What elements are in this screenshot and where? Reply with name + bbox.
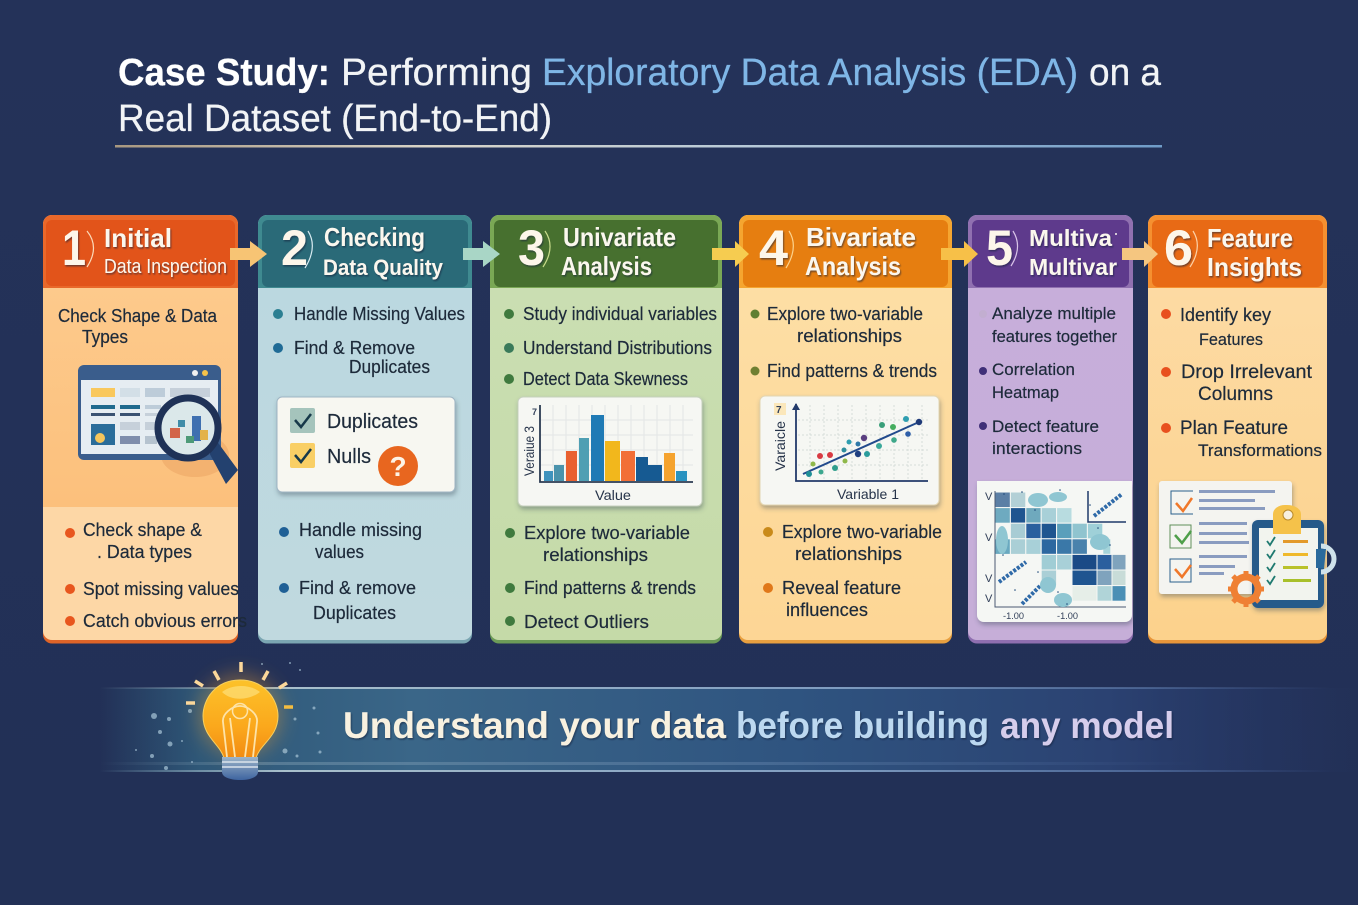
panel 6 list: Transformations <box>1198 441 1322 460</box>
panel 5 list: interactions <box>992 439 1082 458</box>
icon: checklist document and clipboard with gear <box>1159 481 1334 608</box>
panel 6 list: Features <box>1199 330 1263 349</box>
panel 1 heading <box>104 223 227 278</box>
panel 5 list: Heatmap <box>992 383 1059 402</box>
panel 4 heading <box>805 222 916 281</box>
panel 2 lower list: Handle missing <box>299 520 422 540</box>
panel 6 list: Plan Feature <box>1180 418 1288 439</box>
panel 6 list: Identify key <box>1180 305 1271 325</box>
panel 6 list: Columns <box>1198 384 1273 405</box>
title: Exploratory Data Analysis (EDA) <box>542 52 1078 94</box>
panel 6 list: Drop Irrelevant <box>1181 362 1313 383</box>
panel 5: multivariate analysis <box>968 215 1133 644</box>
panel 4 upper list: Find patterns & trends <box>767 361 937 381</box>
panel 3 upper list: Understand Distributions <box>523 338 712 358</box>
panel 2 heading: Checking <box>324 222 425 252</box>
step number 5: 5 <box>986 220 1013 276</box>
panel 1 intro text: Types <box>82 327 128 347</box>
panel 2 upper list: Duplicates <box>349 357 430 377</box>
panel 4 upper list <box>750 304 937 381</box>
title: on a <box>1089 52 1162 94</box>
panel 3 upper list: Study individual variables <box>523 304 717 324</box>
panel 2 upper list <box>273 304 465 377</box>
correlation heatmap: V <box>985 532 993 544</box>
arrow: step 1 to 2 <box>230 241 267 267</box>
panel 4 upper list: relationships <box>797 326 902 346</box>
step number 2: 2 <box>281 220 308 276</box>
panel 3 lower list: Detect Outliers <box>524 612 649 632</box>
correlation heatmap <box>977 481 1132 622</box>
scatter plot card: 7 <box>776 405 782 416</box>
panel 3 lower list: Explore two-variable <box>524 523 690 543</box>
panel 1 checklist: Spot missing values <box>83 579 239 599</box>
panel 1 intro text <box>58 306 218 347</box>
histogram card: Value <box>595 487 631 503</box>
panel 1 checklist: Check shape & <box>83 520 202 540</box>
correlation heatmap: V <box>985 573 993 585</box>
panel 1: initial data inspection <box>43 215 247 644</box>
correlation heatmap: V <box>985 593 993 605</box>
histogram card: 7 <box>532 407 537 417</box>
arrow: step 4 to 5 <box>941 241 978 267</box>
panel 6 list <box>1161 305 1322 460</box>
panel 4: bivariate analysis <box>739 215 952 644</box>
step number 4: 4 <box>759 220 788 276</box>
panel 6 heading: Insights <box>1207 252 1302 282</box>
banner message: Understand your data <box>343 705 726 746</box>
panel 1 heading: Initial <box>104 223 172 253</box>
light rays <box>186 662 293 707</box>
panel 1 checklist <box>65 520 247 631</box>
step number 1: 1 <box>62 220 86 276</box>
correlation heatmap: V <box>985 491 993 503</box>
scatter plot card <box>760 396 939 505</box>
panel 3 upper list <box>504 304 717 389</box>
panel 3: univariate analysis <box>490 215 722 644</box>
panel 5 heading: Multiva <box>1029 225 1112 251</box>
panel 6: feature insights <box>1148 215 1334 644</box>
panel 2 heading: Data Quality <box>323 255 444 280</box>
panel 4 lower list: Explore two-variable <box>782 522 942 542</box>
panel 2 lower list <box>279 520 422 623</box>
particles <box>135 662 322 770</box>
arrow: step 3 to 4 <box>712 241 749 267</box>
banner message: any model <box>1000 705 1174 746</box>
panel 6 heading <box>1207 223 1302 282</box>
panel 2 lower list: values <box>315 542 364 562</box>
panel 5 list: features together <box>992 327 1117 346</box>
checklist card: duplicates and nulls: Duplicates <box>327 411 418 433</box>
title <box>118 52 1162 140</box>
checklist card: duplicates and nulls: ? <box>389 451 407 482</box>
panel 4 heading: Bivariate <box>806 222 916 252</box>
histogram card <box>518 397 702 506</box>
panel 2 lower list: Find & remove <box>299 578 416 598</box>
panel 5 list: Correlation <box>992 360 1075 379</box>
panel 3 lower list <box>505 523 696 632</box>
scatter plot card: Variable 1 <box>837 486 899 502</box>
panel 4 lower list: Reveal feature <box>782 578 901 598</box>
banner message <box>343 705 1174 746</box>
correlation heatmap: -1.00 <box>1057 611 1078 621</box>
step number 3: 3 <box>518 220 545 276</box>
banner <box>100 662 1358 780</box>
icon: data table under magnifying glass <box>78 365 238 484</box>
panel 3 lower list: relationships <box>543 545 648 565</box>
panel 3 upper list: Detect Data Skewness <box>523 369 688 389</box>
icon: light bulb <box>186 662 293 780</box>
panel 3 lower list: Find patterns & trends <box>524 578 696 598</box>
panel 1 intro text: Check Shape & Data <box>58 306 218 326</box>
panel 5 heading: Multivar <box>1029 254 1117 280</box>
arrow: step 5 to 6 <box>1122 241 1158 267</box>
panel 4 heading: Analysis <box>805 251 901 281</box>
panel 2 upper list: Find & Remove <box>294 338 415 358</box>
step number 6: 6 <box>1164 220 1193 276</box>
title: Real Dataset (End-to-End) <box>118 98 552 140</box>
title: Case Study: <box>118 52 330 94</box>
arrow: step 2 to 3 <box>463 241 500 267</box>
histogram card: Veraiue 3 <box>521 426 537 476</box>
panel 1 heading: Data Inspection <box>104 256 227 278</box>
panel 1 checklist: Catch obvious errors <box>83 611 247 631</box>
banner message: before building <box>736 705 989 746</box>
panel 6 heading: Feature <box>1207 223 1293 253</box>
panel 4 lower list: influences <box>786 600 868 620</box>
panel 3 heading: Univariate <box>563 222 676 252</box>
panel 4 lower list <box>763 522 942 620</box>
panel 4 upper list: Explore two-variable <box>767 304 923 324</box>
scatter plot card: Varaicle <box>772 421 788 471</box>
checklist card: duplicates and nulls <box>277 397 455 492</box>
correlation heatmap: -1.00 <box>1003 611 1024 621</box>
panel 2 lower list: Duplicates <box>313 603 396 623</box>
panel 1 checklist: . Data types <box>97 542 192 562</box>
checklist card: duplicates and nulls: Nulls <box>327 446 371 468</box>
panel 2: checking data quality <box>258 215 472 644</box>
panel 5 list: Analyze multiple <box>992 304 1116 323</box>
panel 2 heading <box>323 222 444 280</box>
panel 3 heading <box>561 222 676 281</box>
panel 5 list: Detect feature <box>992 417 1099 436</box>
title: Performing <box>341 52 532 94</box>
panel 5 heading <box>1029 225 1117 280</box>
panel 2 upper list: Handle Missing Values <box>294 304 465 324</box>
panel 4 lower list: relationships <box>795 544 902 564</box>
panel 3 heading: Analysis <box>561 251 652 281</box>
panel 5 list <box>979 304 1117 458</box>
